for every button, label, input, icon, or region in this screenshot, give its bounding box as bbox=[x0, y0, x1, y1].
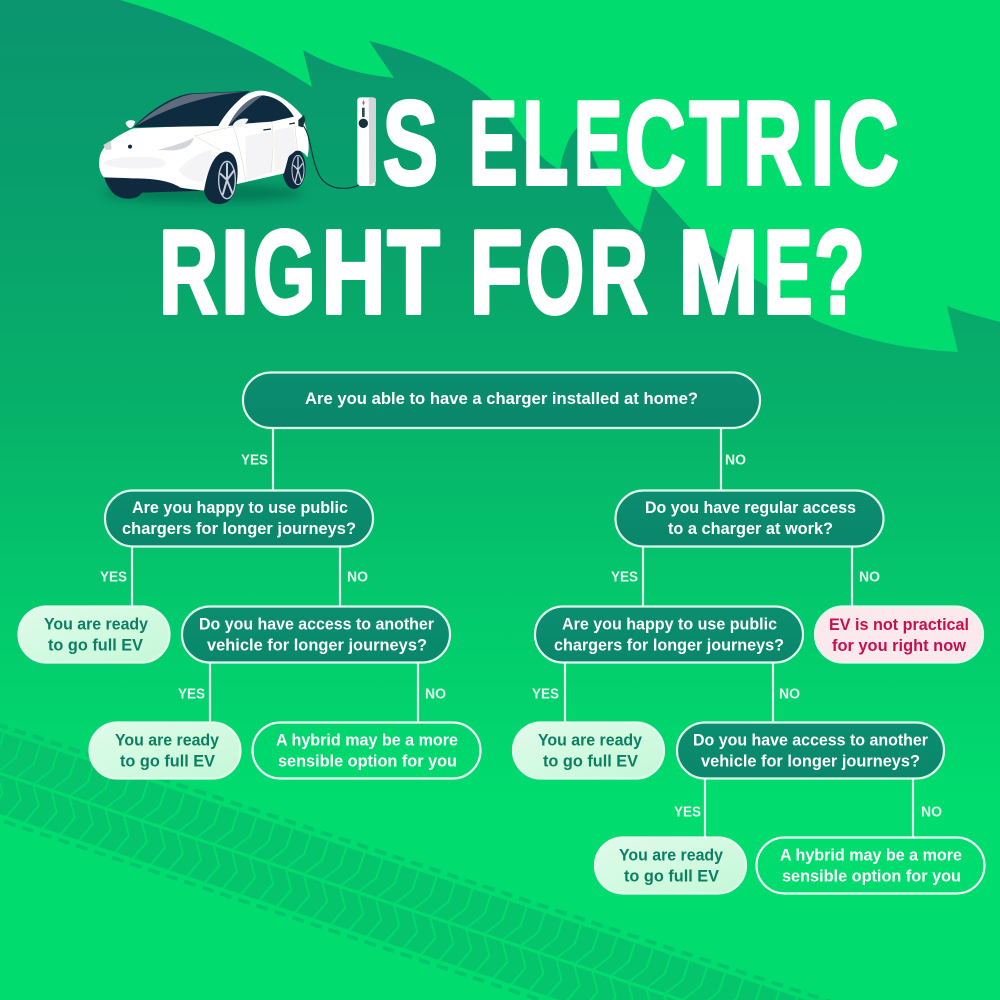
body panels bbox=[104, 127, 297, 182]
front wheel bbox=[204, 152, 238, 204]
title line one: T bbox=[689, 77, 739, 210]
result: ready for full EV (4): You are ready bbox=[619, 846, 724, 864]
branch labels: YES bbox=[241, 452, 268, 468]
result: ready for full EV (1): to go full EV bbox=[48, 636, 143, 654]
question: public chargers (left): chargers for longer journeys? bbox=[122, 520, 356, 538]
charging post bbox=[357, 97, 376, 185]
title line two: T bbox=[387, 206, 440, 339]
mirrors bbox=[126, 119, 248, 128]
branch labels: NO bbox=[347, 570, 368, 586]
title line one: E bbox=[469, 77, 517, 210]
result: ready for full EV (2): to go full EV bbox=[120, 752, 215, 770]
post indicator bbox=[362, 108, 365, 117]
title line two: ? bbox=[814, 206, 865, 339]
question: charger at home: Are you able to have a charger installed at home? bbox=[305, 390, 698, 408]
result: EV not practical: for you right now bbox=[832, 637, 966, 655]
branch labels: YES bbox=[532, 686, 559, 702]
title line two: R bbox=[159, 206, 218, 339]
branch labels: YES bbox=[611, 570, 638, 586]
title line two: H bbox=[322, 206, 385, 339]
result: ready for full EV (1) bbox=[18, 606, 170, 662]
result: hybrid option (1): sensible option for you bbox=[278, 752, 457, 770]
side window bbox=[228, 95, 294, 126]
post socket bbox=[359, 119, 368, 128]
question: charger at home bbox=[243, 372, 760, 428]
result: hybrid option (2) bbox=[756, 838, 984, 894]
charging plug bbox=[298, 115, 305, 127]
branch labels: NO bbox=[921, 804, 942, 820]
title line two: E bbox=[764, 206, 812, 339]
branch labels: NO bbox=[725, 452, 746, 468]
windshield bbox=[133, 91, 250, 127]
result: ready for full EV (2): You are ready bbox=[115, 732, 220, 750]
title line two: F bbox=[470, 206, 522, 339]
title line one: I bbox=[810, 77, 834, 210]
door lines bbox=[195, 122, 297, 182]
branch labels: NO bbox=[859, 570, 880, 586]
logo bbox=[128, 145, 132, 149]
question: another vehicle (left) bbox=[182, 606, 450, 662]
result: hybrid option (2): A hybrid may be a more bbox=[780, 846, 962, 864]
headlights bbox=[103, 138, 194, 150]
result: hybrid option (1) bbox=[252, 722, 480, 778]
question: charger at work bbox=[616, 490, 884, 546]
question: another vehicle (right) bbox=[677, 722, 944, 778]
branch labels: NO bbox=[425, 686, 446, 702]
tyre track bbox=[0, 723, 831, 1000]
post side shading bbox=[369, 97, 376, 185]
title line one: R bbox=[743, 77, 802, 210]
result: ready for full EV (1): You are ready bbox=[44, 616, 149, 634]
post lightning symbol bbox=[362, 99, 365, 107]
title line one: E bbox=[574, 77, 622, 210]
title line two: M bbox=[678, 206, 759, 339]
branch labels: YES bbox=[178, 686, 205, 702]
windshield highlight bbox=[135, 92, 246, 127]
question: another vehicle (right): vehicle for longer journeys? bbox=[701, 752, 920, 770]
question: public chargers (right): chargers for longer journeys? bbox=[554, 636, 784, 654]
charging cable bbox=[303, 125, 360, 188]
result: ready for full EV (4) bbox=[595, 838, 746, 894]
question: public chargers (left) bbox=[105, 490, 373, 546]
connector lines bbox=[132, 428, 913, 837]
title line one: C bbox=[838, 77, 899, 210]
title line two: I bbox=[220, 206, 250, 339]
question: public chargers (right) bbox=[535, 606, 803, 662]
branch labels: YES bbox=[674, 804, 701, 820]
car body bbox=[99, 91, 309, 191]
result: hybrid option (1): A hybrid may be a more bbox=[276, 732, 458, 750]
result: ready for full EV (3): to go full EV bbox=[543, 752, 638, 770]
question: charger at work: Do you have regular access bbox=[645, 499, 856, 517]
result: ready for full EV (3): You are ready bbox=[538, 732, 643, 750]
side window highlight bbox=[228, 95, 263, 126]
title line one: S bbox=[383, 77, 438, 210]
title line one: I bbox=[354, 77, 380, 210]
title line two: R bbox=[589, 206, 648, 339]
question: another vehicle (left): Do you have access to another bbox=[199, 616, 435, 634]
title line two: G bbox=[253, 206, 316, 339]
branch labels: NO bbox=[779, 686, 800, 702]
result: ready for full EV (4): to go full EV bbox=[624, 868, 719, 886]
question: charger at work: to a charger at work? bbox=[668, 520, 833, 538]
car shadow bbox=[103, 184, 303, 203]
door handles bbox=[263, 123, 295, 130]
result: ready for full EV (2) bbox=[90, 722, 240, 778]
result: EV not practical: EV is not practical bbox=[829, 616, 969, 634]
illustration: electric car charging bbox=[99, 91, 360, 204]
car underbody bbox=[103, 173, 208, 199]
question: another vehicle (right): Do you have access to another bbox=[693, 732, 929, 750]
title bbox=[159, 77, 899, 339]
title line one: C bbox=[625, 77, 686, 210]
branch labels bbox=[100, 452, 942, 820]
rear rim bbox=[292, 155, 304, 185]
result: EV not practical bbox=[815, 606, 983, 662]
question: public chargers (left): Are you happy to use public bbox=[132, 499, 348, 517]
branch labels: YES bbox=[100, 570, 127, 586]
rear wheel bbox=[282, 148, 306, 189]
result: hybrid option (2): sensible option for you bbox=[782, 868, 961, 886]
question: another vehicle (left): vehicle for longer journeys? bbox=[207, 636, 427, 654]
title line two: O bbox=[526, 206, 584, 339]
question: public chargers (right): Are you happy to use public bbox=[562, 616, 777, 634]
result: ready for full EV (3) bbox=[513, 722, 664, 778]
title line one: L bbox=[522, 77, 568, 210]
